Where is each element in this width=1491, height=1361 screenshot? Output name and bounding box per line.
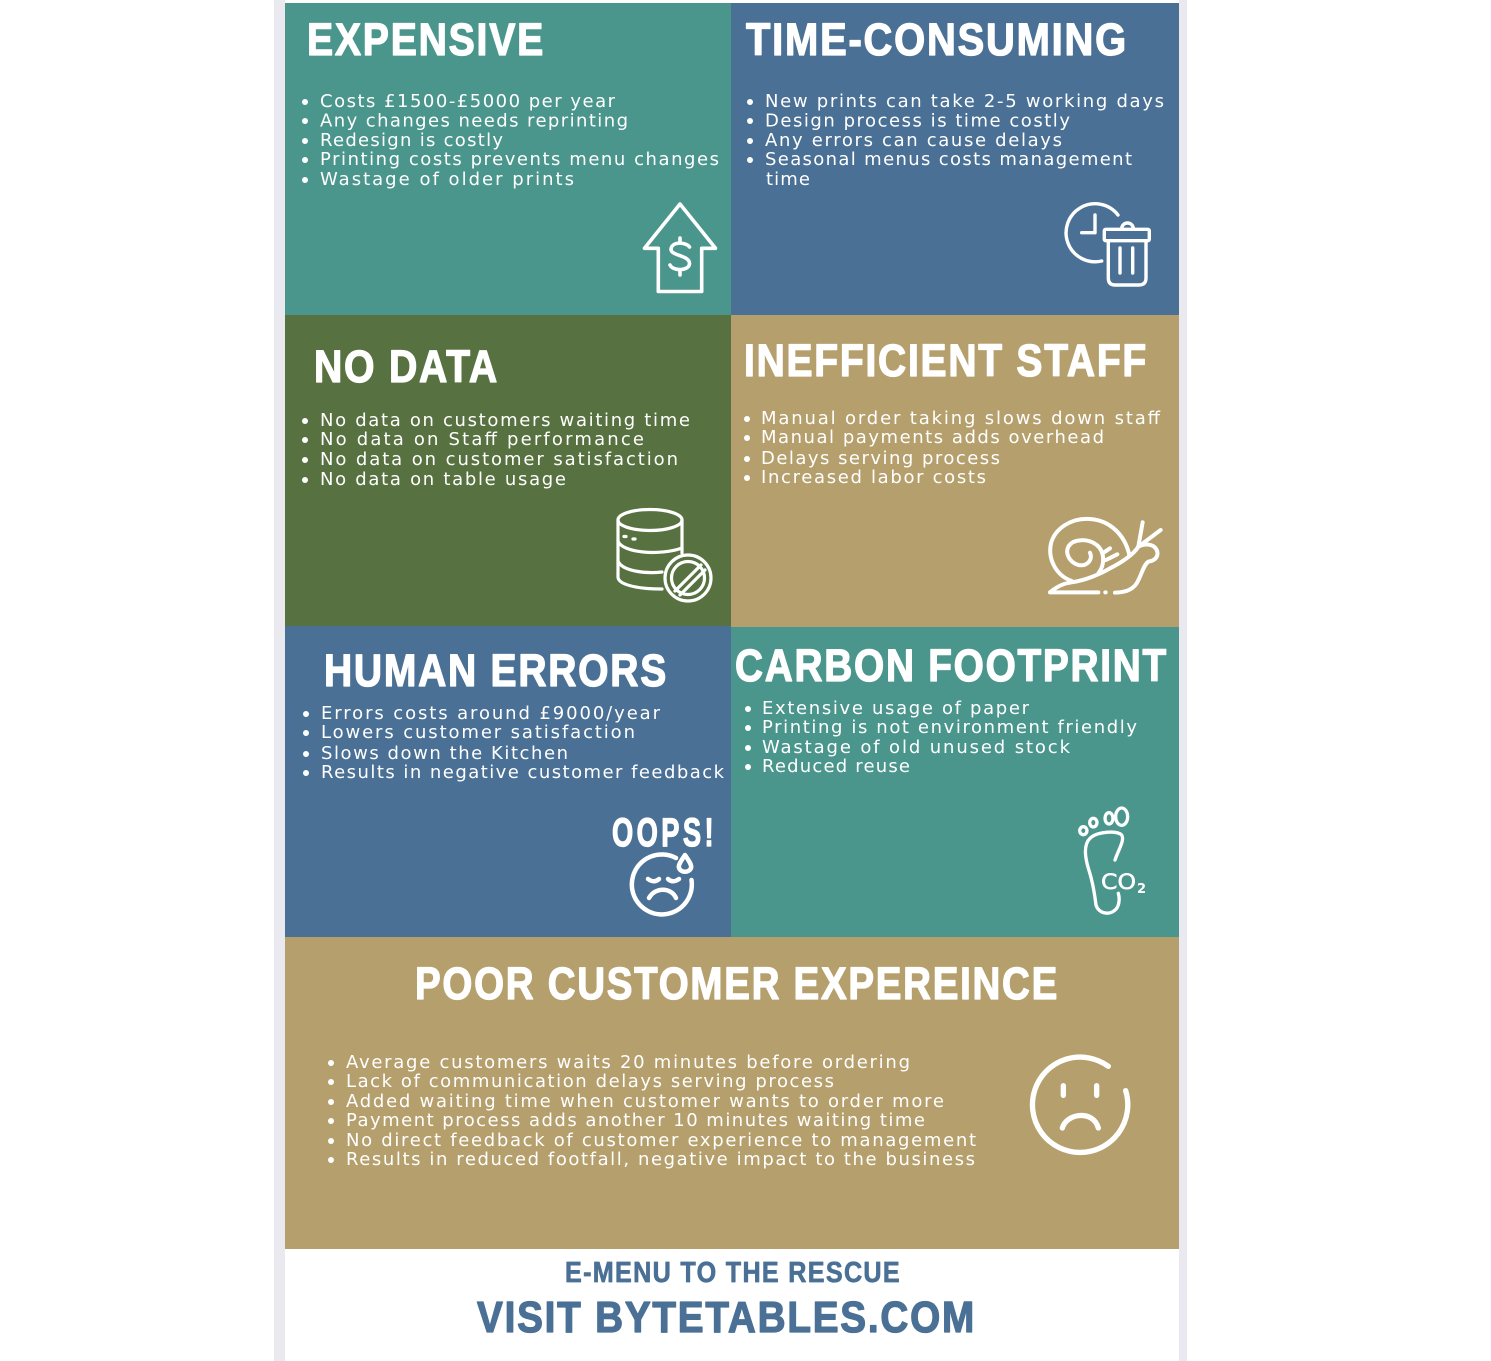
icon: clock and trash can [1066, 204, 1149, 285]
list: expensive points: Redesign is costly [320, 130, 503, 151]
list: customer experience points: Results in reduced footfall, negative impact to the business [346, 1149, 975, 1170]
list: no data points: No data on customers waiting time [320, 410, 690, 431]
panel: poor customer experience [285, 937, 1179, 1249]
list: expensive points: Costs £1500-£5000 per year [320, 91, 616, 112]
icon: footprint with CO2: 2 [1137, 882, 1146, 897]
list: carbon points: Wastage of old unused stock [762, 737, 1071, 758]
panel: no data [285, 315, 731, 626]
heading: human errors: HUMAN ERRORS [324, 645, 668, 696]
list: expensive points: Wastage of older prints [320, 169, 574, 190]
panel: expensive [285, 3, 731, 315]
list: staff points [744, 408, 1161, 488]
list: staff points: Increased labor costs [761, 467, 986, 488]
icon: footprint with CO2: CO [1101, 870, 1136, 894]
footer line: visit bytetables.com: VISIT BYTETABLES.COM [477, 1293, 976, 1342]
heading: inefficient staff: INEFFICIENT STAFF [744, 335, 1148, 386]
list: carbon points: Reduced reuse [762, 756, 910, 777]
list: human errors points: Slows down the Kitchen [321, 743, 568, 764]
footer: call to action [477, 1257, 976, 1342]
list: carbon points: Extensive usage of paper [762, 698, 1030, 719]
heading: carbon footprint: CARBON FOOTPRINT [735, 640, 1168, 691]
heading: time-consuming: TIME-CONSUMING [746, 14, 1128, 65]
list: human errors points: Errors costs around £9000/year [321, 703, 661, 724]
list: expensive points [302, 91, 719, 190]
list: no data points [302, 410, 690, 490]
list: time-consuming points [747, 91, 1164, 190]
list: time-consuming points: Any errors can cause delays [765, 130, 1062, 151]
list: carbon points [745, 698, 1137, 777]
list: expensive points: Any changes needs reprinting [320, 110, 628, 132]
list: time-consuming points: New prints can take 2-5 working days [765, 91, 1164, 112]
icon: snail [1050, 519, 1161, 593]
heading: no data: NO DATA [314, 341, 499, 392]
heading: poor customer experience: POOR CUSTOMER EXPEREINCE [415, 958, 1059, 1009]
panel: time-consuming [731, 3, 1179, 315]
list: no data points: No data on table usage [320, 469, 566, 490]
list: time-consuming points: Seasonal menus costs management [765, 149, 1132, 170]
list: customer experience points [328, 1052, 976, 1170]
panel: inefficient staff [731, 315, 1179, 627]
panel: carbon footprint [731, 627, 1179, 937]
list: time-consuming points: Design process is time costly [765, 110, 1070, 132]
icon: sad face [1032, 1057, 1128, 1152]
heading: expensive: EXPENSIVE [307, 14, 545, 65]
icon: oops sad face: OOPS! [612, 811, 717, 855]
list: customer experience points: Payment process adds another 10 minutes waiting time [346, 1110, 925, 1131]
icon: footprint with CO2 [1080, 808, 1146, 913]
list: expensive points: Printing costs prevents menu changes [320, 149, 719, 170]
list: human errors points [303, 703, 725, 783]
icon: house arrow with dollar [644, 204, 716, 292]
list: staff points: Delays serving process [761, 448, 1000, 469]
list: customer experience points: Lack of communication delays serving process [346, 1071, 834, 1092]
list: staff points: Manual order taking slows down staff [761, 408, 1161, 429]
list: human errors points: Results in negative customer feedback [321, 762, 725, 783]
list: time-consuming points: time [766, 169, 810, 190]
panel: human errors [285, 626, 731, 937]
list: customer experience points: Added waiting time when customer wants to order more [346, 1091, 944, 1112]
list: no data points: No data on Staff performance [320, 429, 644, 450]
list: carbon points: Printing is not environment friendly [762, 717, 1137, 738]
icon: database with prohibition sign [618, 510, 711, 601]
list: staff points: Manual payments adds overhead [761, 427, 1104, 448]
list: customer experience points: Average customers waits 20 minutes before ordering [346, 1052, 910, 1073]
list: human errors points: Lowers customer satisfaction [321, 722, 635, 743]
icon: oops sad face [612, 811, 717, 914]
footer line: e-menu to the rescue: E-MENU TO THE RESCUE [565, 1257, 901, 1289]
list: no data points: No data on customer satisfaction [320, 449, 678, 470]
list: customer experience points: No direct feedback of customer experience to management [346, 1130, 976, 1151]
